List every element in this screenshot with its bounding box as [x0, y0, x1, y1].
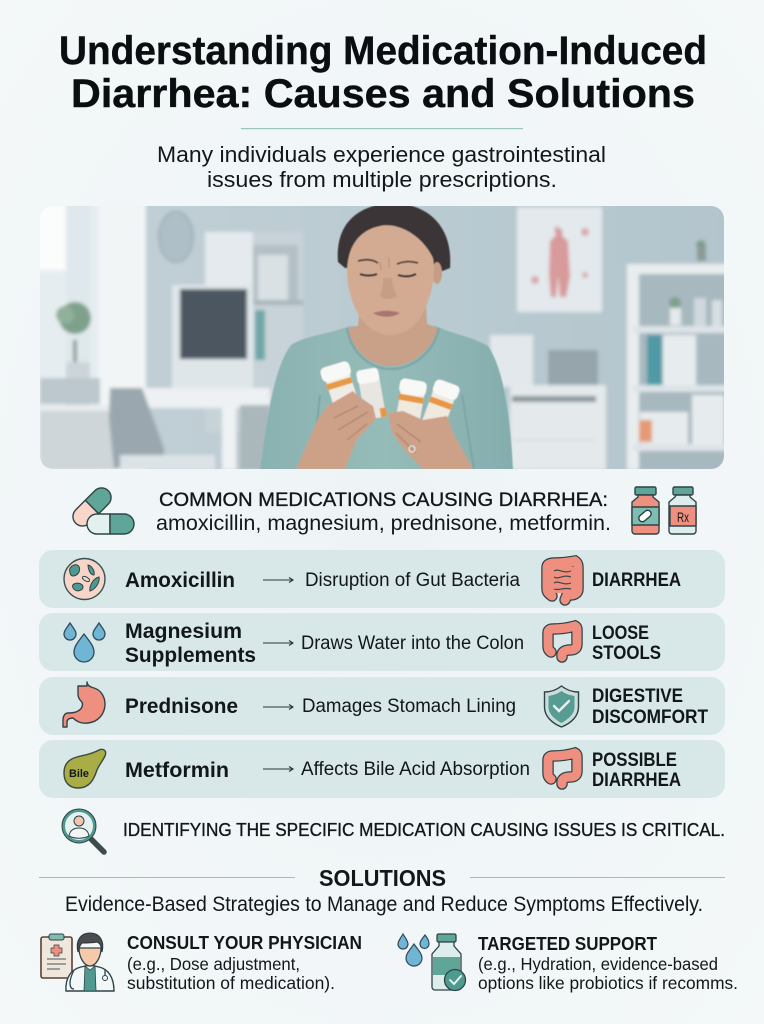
neck and chest [348, 305, 438, 366]
right hand [388, 411, 473, 469]
icon: gut bacteria [64, 558, 105, 600]
effect: DIGESTIVE [592, 686, 683, 707]
icon: medicine bottles: Rx [677, 509, 689, 525]
face [347, 225, 434, 335]
solution: targeted support: (e.g., Hydration, evidence-based [478, 954, 718, 974]
row: prednisone [39, 677, 725, 735]
medication name: Magnesium [125, 620, 242, 643]
solution: consult your physician: substitution of medication). [127, 973, 335, 993]
icon: colon [548, 626, 577, 657]
icon: bile: Bile [69, 768, 89, 780]
icon: stomach [63, 682, 105, 727]
medication name: Prednisone [125, 695, 238, 718]
row: amoxicillin [39, 550, 725, 608]
subtitle [157, 142, 606, 192]
common medications text: COMMON MEDICATIONS CAUSING DIARRHEA: [159, 489, 608, 511]
icon: colon [548, 753, 577, 784]
common medications text [156, 489, 611, 535]
medication name [125, 620, 256, 667]
icon: shield with check [544, 686, 578, 727]
effect: DISCOMFORT [592, 707, 708, 728]
solution: consult your physician: (e.g., Dose adjustment, [127, 954, 300, 974]
solution: targeted support: options like probiotics if recomms. [478, 973, 738, 993]
effect: DIARRHEA [592, 770, 681, 791]
mechanism: Affects Bile Acid Absorption [301, 759, 530, 780]
left hand [296, 391, 376, 469]
medication name: Amoxicillin [125, 569, 235, 592]
title [59, 29, 707, 116]
solution: consult your physician: CONSULT YOUR PHYSICIAN [127, 933, 362, 953]
photo: woman examining prescription bottles in an office [36, 200, 728, 475]
icon: capsules [69, 484, 134, 534]
effect: DIARRHEA [592, 570, 681, 591]
effect [592, 623, 661, 664]
effect: POSSIBLE [592, 750, 677, 771]
icon: water drops [64, 623, 105, 662]
mechanism: Disruption of Gut Bacteria [305, 570, 520, 591]
effect [592, 686, 708, 728]
row: magnesium supplements [39, 613, 725, 671]
hair [338, 203, 450, 272]
medication name: Metformin [125, 759, 229, 782]
icon: magnifying glass with doctor [62, 809, 104, 852]
solutions heading: SOLUTIONS [319, 865, 446, 891]
title: Understanding Medication-Induced [59, 29, 707, 73]
solutions intro: Evidence-Based Strategies to Manage and Reduce Symptoms Effectively. [65, 893, 703, 916]
subtitle: Many individuals experience gastrointestinal [157, 142, 606, 167]
solution: consult your physician [127, 933, 362, 993]
mechanism: Draws Water into the Colon [301, 633, 524, 654]
arrow [263, 578, 293, 582]
medication name: Supplements [125, 644, 256, 667]
sweater [260, 326, 513, 470]
solution: targeted support: TARGETED SUPPORT [478, 934, 657, 954]
arrow [263, 766, 293, 772]
effect: LOOSE [592, 623, 649, 644]
solution: targeted support [478, 934, 738, 993]
panel: medication rows [39, 550, 725, 798]
ear [432, 262, 442, 284]
title: Diarrhea: Causes and Solutions [71, 72, 695, 116]
callout: identify the medication: IDENTIFYING THE SPECIFIC MEDICATION CAUSING ISSUES IS CRITICAL. [123, 819, 725, 840]
icon: intestines [547, 561, 578, 600]
row: metformin [39, 740, 725, 798]
bottles [320, 360, 356, 403]
effect [592, 750, 681, 791]
mechanism: Damages Stomach Lining [302, 696, 516, 717]
effect: STOOLS [592, 643, 661, 664]
common medications text: amoxicillin, magnesium, prednisone, metformin. [156, 512, 611, 535]
subtitle: issues from multiple prescriptions. [207, 167, 557, 192]
arrow [263, 704, 293, 710]
icon: physician with clipboard [41, 933, 114, 991]
arrow [263, 640, 293, 646]
icon: bile [64, 749, 106, 788]
icon: hydration drops and bottle [398, 934, 466, 990]
icon: medicine bottles [632, 487, 696, 534]
